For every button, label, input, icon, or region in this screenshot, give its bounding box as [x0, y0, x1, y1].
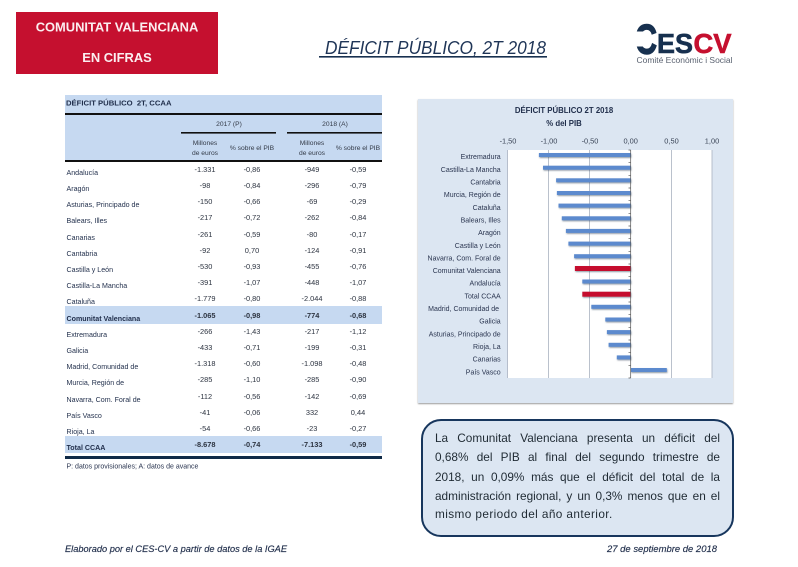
table column headers: % sobre el PIB	[230, 145, 275, 152]
category labels: Castilla-La Mancha	[441, 167, 501, 174]
table column headers: de euros	[192, 150, 219, 157]
table rows: -0,98	[244, 311, 260, 320]
table rows: Murcia, Región de	[66, 379, 124, 387]
table rows: -1.318	[195, 359, 215, 368]
table rows: -0,68	[350, 311, 366, 320]
table rows: -0,90	[350, 375, 366, 384]
table rows: -0,86	[244, 165, 260, 174]
callout: summary text: 2018, un 0,09% más que el déficit del total de la	[435, 470, 720, 484]
chart title: % del PIB	[546, 119, 582, 128]
footer source: Elaborado por el CES-CV a partir de datos de la IGAE	[65, 544, 288, 554]
header badge: Comunitat Valenciana en cifras	[16, 12, 218, 74]
table column headers	[65, 113, 382, 162]
table rows: -261	[198, 230, 212, 239]
table column headers: de euros	[299, 150, 326, 157]
table rows: -0,31	[350, 343, 366, 352]
logo: CESCV: C	[635, 16, 657, 62]
table rows: -266	[198, 327, 212, 336]
table rows: Rioja, La	[66, 428, 95, 436]
table rows: -199	[305, 343, 319, 352]
table rows: -7.133	[302, 440, 322, 449]
table rows: -1,10	[244, 375, 260, 384]
table rows: -448	[305, 278, 319, 287]
table rows: Aragón	[66, 185, 89, 193]
bars	[539, 153, 667, 372]
table rows: Castilla-La Mancha	[66, 282, 127, 290]
category labels: Andalucía	[470, 281, 501, 288]
table rows: -142	[305, 392, 319, 401]
table rows: -54	[200, 424, 210, 433]
table rows: -41	[200, 408, 210, 417]
table rows: -0,59	[350, 165, 366, 174]
table rows: Comunitat Valenciana	[66, 315, 140, 323]
table rows: País Vasco	[66, 412, 102, 420]
table rows: Extremadura	[66, 331, 107, 339]
category labels: Murcia, Región de	[444, 192, 501, 199]
table rows: -124	[305, 246, 319, 255]
x axis labels: -1,00	[541, 136, 557, 146]
table rows: -0,74	[244, 440, 261, 449]
logo: CESCV	[633, 16, 733, 65]
category labels: Castilla y León	[455, 243, 501, 250]
table rows: Total CCAA	[66, 444, 105, 452]
table rows: -433	[198, 343, 212, 352]
table column headers: % sobre el PIB	[336, 145, 381, 152]
chart title: DÉFICIT PÚBLICO 2T 2018	[515, 106, 614, 115]
x axis labels: -1,50	[500, 136, 516, 146]
data table: déficit público by CCAA	[65, 95, 382, 470]
table column headers: Millones	[193, 140, 218, 147]
callout: summary text: La Comunitat Valenciana presenta un déficit del	[435, 431, 720, 445]
callout: summary text: mismo periodo del año anterior.	[435, 507, 613, 521]
table column headers: 2017 (P)	[216, 121, 242, 128]
x axis labels: 1,00	[705, 136, 719, 146]
table title band: DÉFICIT PÚBLICO 2T, CCAA	[66, 98, 172, 108]
bar chart panel: déficit público 2T 2018	[418, 99, 733, 403]
header badge: Comunitat Valenciana en cifras: COMUNITAT VALENCIANA	[36, 20, 198, 34]
table rows: -0,17	[350, 230, 366, 239]
table rows: -391	[198, 278, 212, 287]
table rows: -1,07	[244, 278, 260, 287]
chart title	[515, 106, 614, 128]
x axis labels: 0,50	[664, 136, 679, 146]
table rows: -285	[305, 375, 319, 384]
table rows: -296	[305, 181, 319, 190]
table rows: -0,66	[244, 424, 260, 433]
table rows: -69	[307, 197, 317, 206]
footer date: 27 de septiembre de 2018	[606, 544, 718, 554]
table rows: Asturias, Principado de	[66, 201, 140, 209]
table rows: Madrid, Comunidad de	[66, 363, 138, 371]
category labels: Cantabria	[470, 180, 501, 186]
table rows: Navarra, Com. Foral de	[66, 396, 141, 404]
table title band	[65, 95, 382, 113]
table rows: -217	[198, 213, 212, 222]
category labels: Rioja, La	[473, 344, 501, 351]
table rows: -262	[305, 213, 319, 222]
x axis labels	[500, 136, 719, 146]
table rows: -0,76	[350, 262, 366, 271]
highlight band: Total CCAA row	[65, 436, 382, 453]
table rows: -2.044	[302, 294, 322, 303]
logo: CESCV: CV	[694, 28, 732, 59]
table rows: -0,59	[244, 230, 260, 239]
table rows: 0,44	[351, 408, 365, 417]
category labels: Balears, Illes	[461, 218, 501, 224]
table rows: -530	[198, 262, 212, 271]
logo: CESCV: Comité Econòmic i Social	[636, 55, 733, 65]
table rows: Castilla y León	[66, 266, 113, 274]
table rows: -98	[200, 181, 210, 190]
category labels: País Vasco	[466, 369, 501, 376]
table rows: -285	[198, 375, 212, 384]
category labels: Canarias	[473, 357, 501, 364]
table rows: -217	[305, 327, 319, 336]
table rows: -949	[305, 165, 319, 174]
table rows: -0,29	[350, 197, 366, 206]
table rows: Cataluña	[66, 298, 95, 306]
table rows: -1,43	[244, 327, 260, 336]
table rows: -774	[305, 311, 320, 320]
table rows: -1.065	[195, 311, 215, 320]
table rows: -0,71	[244, 343, 260, 352]
table rows: -0,59	[350, 440, 366, 449]
callout: summary text: administración regional, y un 0,3% menos que en el	[435, 489, 720, 503]
category labels: Aragón	[478, 230, 501, 237]
table rows: -0,84	[244, 181, 260, 190]
table rows: -1.098	[302, 359, 322, 368]
x axis labels: -0,50	[582, 136, 598, 146]
category labels: Total CCAA	[465, 293, 501, 300]
plot area	[508, 150, 712, 378]
table rows: -1.331	[195, 165, 215, 174]
table rows: -0,93	[244, 262, 260, 271]
highlight band: Comunitat Valenciana row	[65, 306, 382, 324]
table rows: -455	[305, 262, 319, 271]
table rows: -0,88	[350, 294, 366, 303]
table rows: Galicia	[66, 347, 88, 355]
table rows: -112	[198, 392, 212, 401]
table rows	[66, 165, 366, 452]
table rows: -0,27	[350, 424, 366, 433]
zero axis with ticks	[628, 150, 631, 378]
table rows: -0,60	[244, 359, 260, 368]
callout: summary text: 0,68% del PIB al final del segundo trimestre de	[435, 450, 720, 464]
table rows: -0,84	[350, 213, 366, 222]
category labels: Comunitat Valenciana	[433, 268, 501, 275]
page title: DÉFICIT PÚBLICO, 2T 2018	[325, 37, 546, 58]
table column headers: 2018 (A)	[322, 121, 348, 128]
table rows: -92	[200, 246, 210, 255]
table rows: -0,66	[244, 197, 260, 206]
table rows: -0,48	[350, 359, 366, 368]
table rows: Cantabria	[66, 250, 97, 258]
table rows: -1,12	[350, 327, 366, 336]
table rows: -23	[307, 424, 317, 433]
table rows: -0,80	[244, 294, 260, 303]
table rows: -1.779	[195, 294, 215, 303]
table rows: -0,91	[350, 246, 366, 255]
table rows: -0,79	[350, 181, 366, 190]
category labels	[428, 154, 501, 376]
table column headers: Millones	[300, 140, 325, 147]
table rows: -0,06	[244, 408, 260, 417]
table rows: 332	[306, 408, 318, 417]
category labels: Asturias, Principado de	[429, 331, 501, 338]
table rows: Balears, Illes	[66, 217, 108, 225]
category labels: Cataluña	[473, 205, 501, 212]
table footnote: P: datos provisionales; A: datos de avance	[66, 464, 199, 470]
table rows: -8.678	[195, 440, 215, 449]
table rows: -0,56	[244, 392, 260, 401]
logo: CESCV: ES	[657, 28, 693, 59]
table rows: 0,70	[245, 246, 259, 255]
header badge: Comunitat Valenciana en cifras: EN CIFRAS	[82, 50, 152, 65]
category labels: Madrid, Comunidad de	[428, 306, 499, 313]
table rows: -0,69	[350, 392, 366, 401]
table rows: -1,07	[350, 278, 366, 287]
x axis labels: 0,00	[624, 136, 638, 146]
callout: summary text	[421, 419, 734, 537]
table rows: -80	[307, 230, 317, 239]
category labels: Galicia	[479, 319, 501, 326]
table rows: Canarias	[66, 234, 95, 242]
table rows: -150	[198, 197, 212, 206]
category labels: Navarra, Com. Foral de	[428, 255, 501, 262]
table rows: -0,72	[244, 213, 260, 222]
table rows: Andalucía	[66, 169, 98, 177]
category labels: Extremadura	[461, 154, 501, 161]
